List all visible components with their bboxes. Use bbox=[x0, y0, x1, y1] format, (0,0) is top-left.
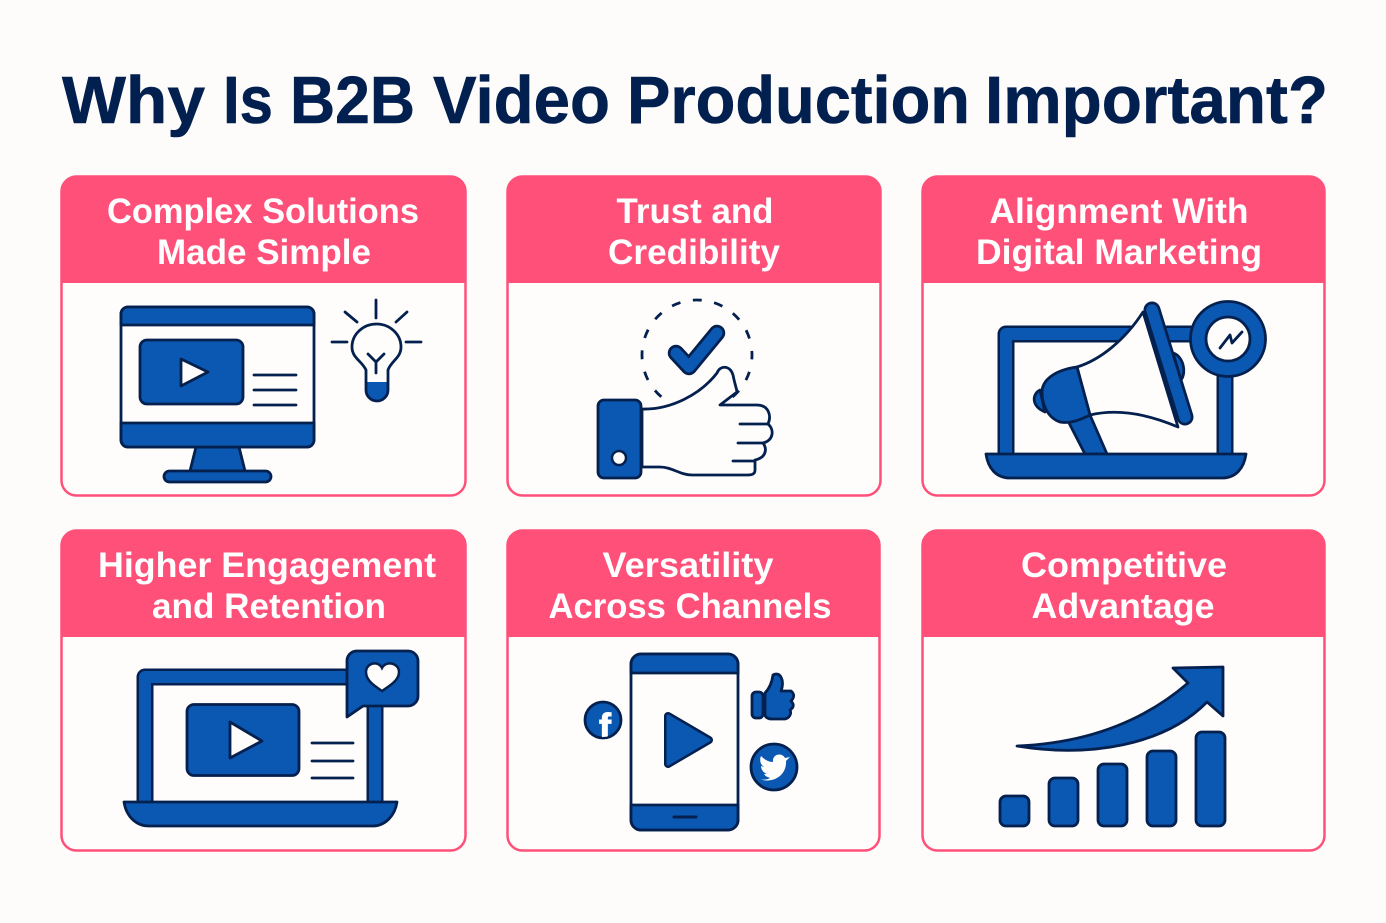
icon: laptop with megaphone bbox=[986, 302, 1266, 478]
panel: competitive advantage bbox=[922, 530, 1325, 850]
icon: facebook bbox=[585, 702, 621, 747]
panel: versatility bbox=[507, 530, 880, 850]
heading: versatility: Versatility bbox=[602, 546, 774, 585]
icon: light bulb bbox=[332, 300, 421, 401]
heading: trust and credibility: Trust and bbox=[616, 192, 774, 231]
heading: higher engagement: and Retention bbox=[152, 587, 386, 626]
title: Why bbox=[62, 63, 205, 138]
panel: alignment with digital marketing bbox=[922, 176, 1325, 496]
title: B2B bbox=[290, 63, 415, 138]
title: Is bbox=[223, 63, 273, 138]
heading: trust and credibility: Credibility bbox=[608, 233, 781, 272]
icon: monitor with video bbox=[121, 307, 314, 482]
panel: higher engagement bbox=[61, 530, 466, 850]
title: Important? bbox=[985, 63, 1328, 138]
heading: complex solutions: Made Simple bbox=[157, 233, 371, 272]
icon: thumbs up bbox=[752, 674, 794, 719]
heading: alignment with digital marketing: Alignment With bbox=[990, 192, 1248, 231]
icon: thumbs up with check bbox=[598, 300, 772, 478]
icon: laptop with video and heart bbox=[124, 651, 418, 826]
heading: competitive advantage: Competitive bbox=[1021, 546, 1227, 585]
icon: growth chart with arrow bbox=[1000, 667, 1225, 826]
icon: twitter bbox=[751, 744, 797, 790]
panel: trust and credibility bbox=[507, 176, 881, 496]
panel: complex solutions bbox=[61, 176, 466, 496]
title: Video bbox=[433, 63, 610, 138]
icon: phone with social icons bbox=[585, 654, 797, 830]
heading: versatility: Across Channels bbox=[548, 587, 832, 626]
title: Production bbox=[627, 63, 970, 138]
heading: competitive advantage: Advantage bbox=[1032, 587, 1214, 626]
heading: complex solutions: Complex Solutions bbox=[107, 192, 419, 231]
icon: facebook: f bbox=[599, 706, 612, 747]
heading: alignment with digital marketing: Digital Marketing bbox=[976, 233, 1262, 272]
heading: higher engagement: Higher Engagement bbox=[98, 546, 436, 585]
